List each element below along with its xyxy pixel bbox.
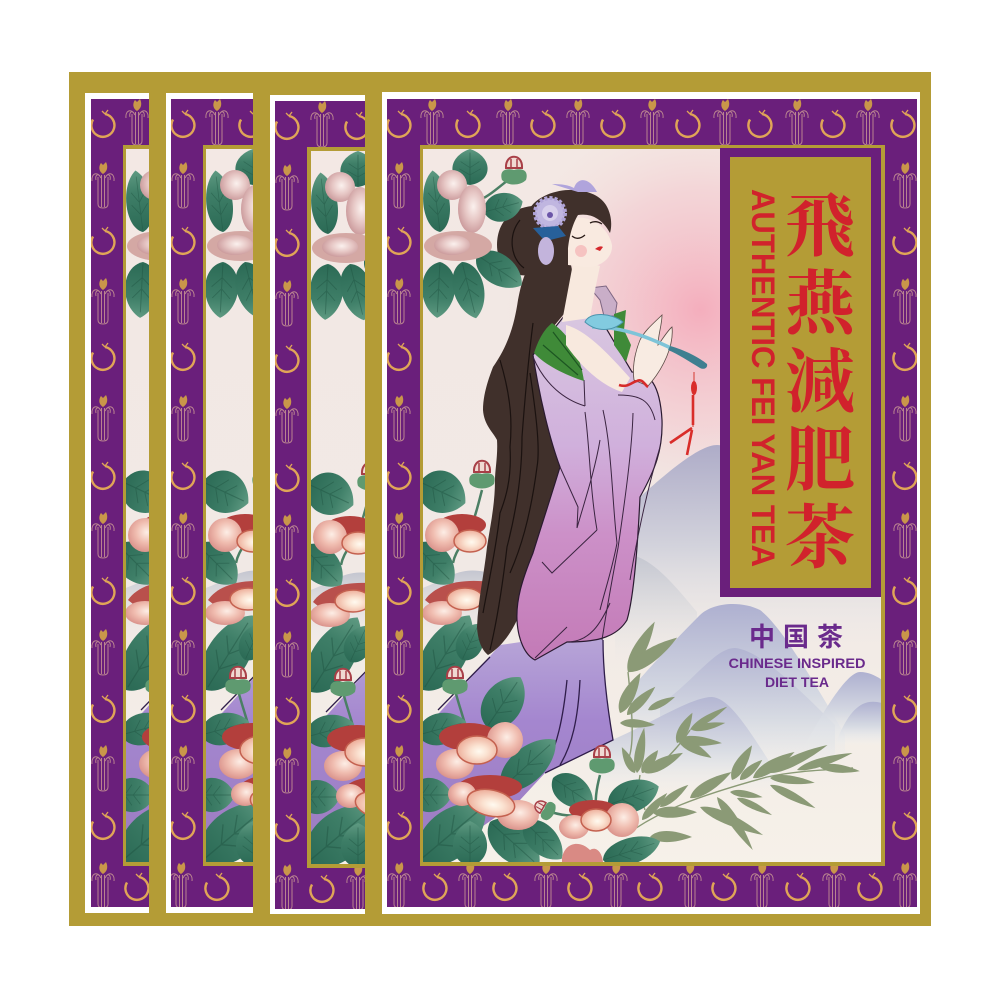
Chinese product name: 減 (785, 345, 855, 422)
subtitle: DIET TEA (765, 674, 829, 690)
packet 3 (270, 95, 365, 914)
title panel (720, 148, 881, 597)
packet 1 (rear) (85, 93, 149, 913)
subtitle: 中国茶 (749, 622, 851, 652)
Chinese product name: 燕 (785, 267, 859, 344)
Chinese product name (785, 189, 859, 578)
packet 2 (166, 93, 253, 913)
gold backing of the four packets (69, 72, 931, 926)
subtitle: CHINESE INSPIRED (728, 655, 866, 671)
purple ornamental border (387, 99, 917, 908)
white edge (382, 92, 920, 914)
illustration: lady with flowers, bamboo and mountains (423, 149, 881, 862)
subtitle (728, 622, 866, 690)
Chinese product name: 茶 (785, 501, 855, 578)
English product name: AUTHENTIC FEI YAN TEA (745, 189, 781, 567)
Chinese product name: 肥 (785, 423, 855, 500)
packet 4 (front) (382, 92, 920, 914)
Chinese product name: 飛 (785, 189, 855, 266)
